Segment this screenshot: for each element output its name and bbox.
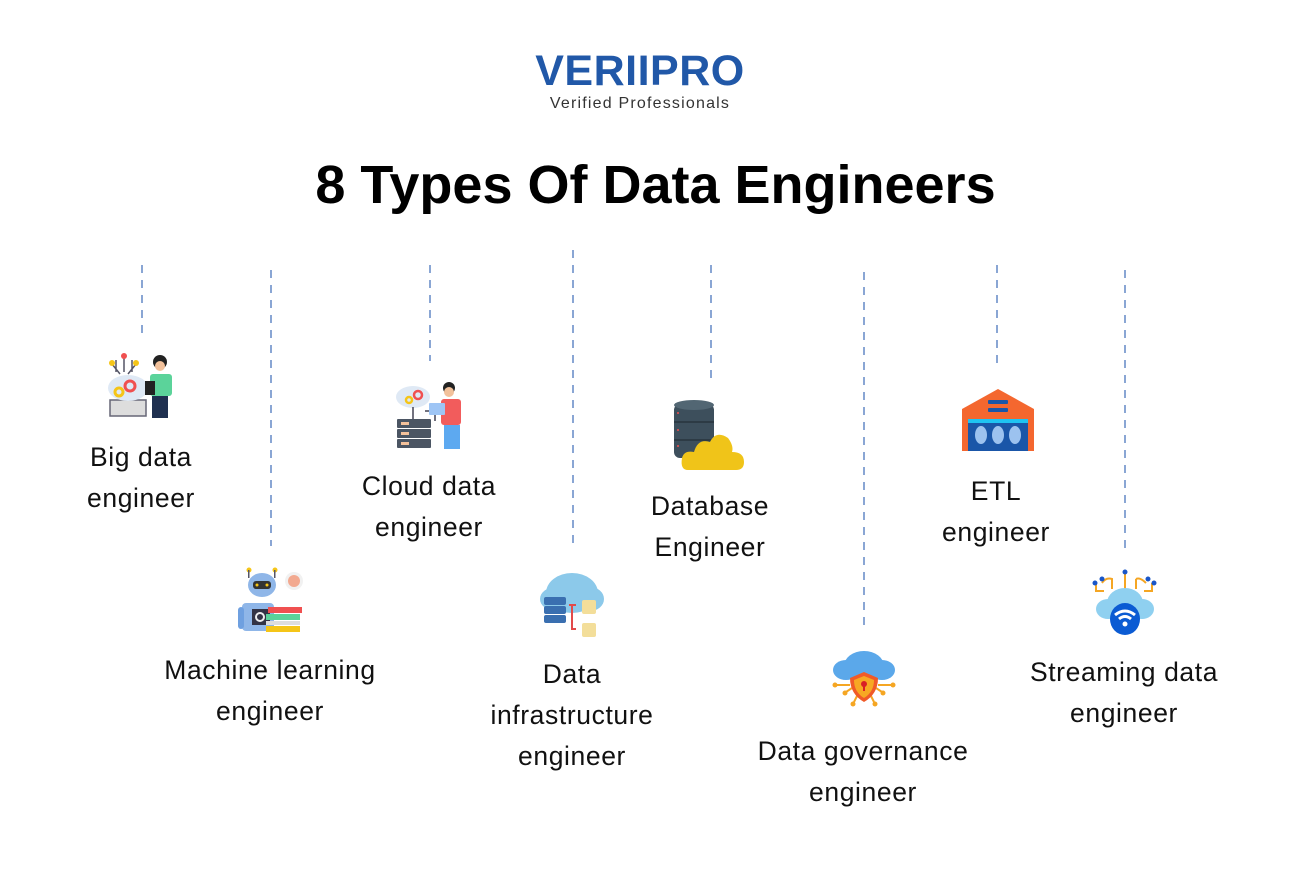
text: streaming: Streaming data xyxy=(1030,657,1218,687)
text: database: Engineer xyxy=(655,532,765,562)
title: 8 Types Of Data Engineers xyxy=(315,155,996,215)
text: machine learning: Machine learning xyxy=(164,655,376,685)
text: data governance xyxy=(758,736,968,807)
text: cloud data xyxy=(362,471,496,542)
text: data infrastructure: Data xyxy=(543,659,601,689)
logo: VERIIPRO xyxy=(535,47,745,95)
icon: big data xyxy=(108,353,172,418)
text: big data xyxy=(87,442,195,513)
text: cloud data: Cloud data xyxy=(362,471,496,501)
text: data governance: engineer xyxy=(809,777,917,807)
icon: cloud data xyxy=(396,382,461,449)
text: machine learning: engineer xyxy=(216,696,324,726)
icon: ETL xyxy=(962,389,1034,451)
icon: machine learning xyxy=(238,568,303,632)
text: ETL xyxy=(942,476,1050,547)
text: machine learning xyxy=(164,655,376,726)
text: data governance: Data governance xyxy=(758,736,968,766)
text: ETL: ETL xyxy=(971,476,1021,506)
text: big data: Big data xyxy=(90,442,192,472)
text: data infrastructure xyxy=(490,659,654,771)
icon: data infrastructure xyxy=(540,573,604,637)
icon: database xyxy=(674,400,744,470)
text: data infrastructure: infrastructure xyxy=(490,700,654,730)
text: cloud data: engineer xyxy=(375,512,483,542)
text: streaming: engineer xyxy=(1070,698,1178,728)
text: ETL: engineer xyxy=(942,517,1050,547)
text: database xyxy=(651,491,769,562)
icon: data governance xyxy=(832,651,896,706)
text: data infrastructure: engineer xyxy=(518,741,626,771)
text: database: Database xyxy=(651,491,769,521)
text: streaming xyxy=(1030,657,1218,728)
text: big data: engineer xyxy=(87,483,195,513)
logo: Verified Professionals xyxy=(550,95,730,112)
icon: streaming xyxy=(1092,570,1156,635)
